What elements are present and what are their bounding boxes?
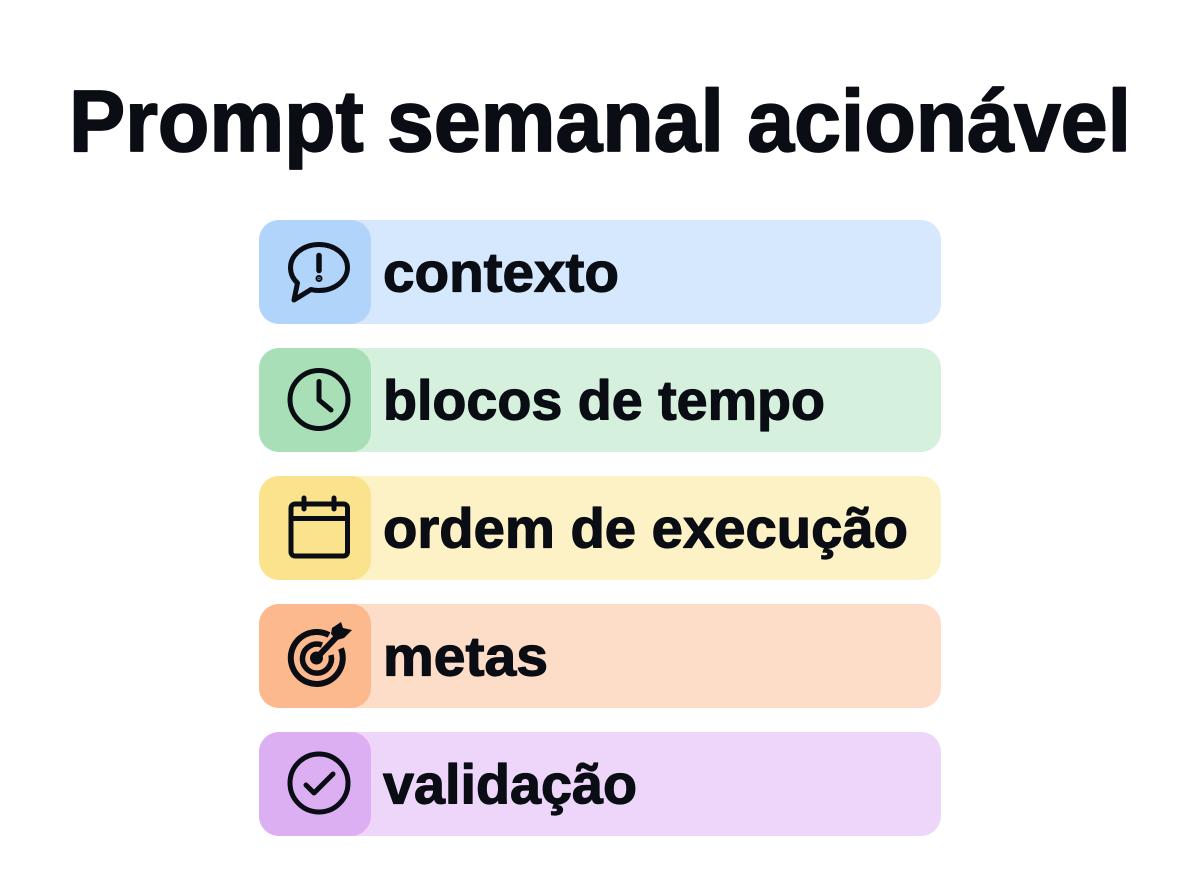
icon tile: ordem de execução [259, 476, 371, 580]
icon tile: contexto [259, 220, 371, 324]
panel: metas [259, 604, 941, 708]
label: validação: validação [383, 754, 637, 816]
panel: validação [259, 732, 941, 836]
icon tile: metas [259, 604, 371, 708]
icon: speech bubble with exclamation [290, 244, 348, 300]
icon: target with arrow [291, 622, 352, 684]
panel: contexto [259, 220, 941, 324]
icon: clock [290, 370, 348, 428]
title: Prompt semanal acionável [69, 73, 1131, 170]
icon tile: validação [259, 732, 371, 836]
label: contexto: contexto [383, 242, 619, 304]
panel: ordem de execução [259, 476, 941, 580]
label: metas: metas [383, 626, 548, 688]
label: ordem de execução: ordem de execução [383, 498, 908, 560]
icon tile: blocos de tempo [259, 348, 371, 452]
label: blocos de tempo: blocos de tempo [383, 370, 825, 432]
icon: check circle [290, 754, 348, 812]
panel: blocos de tempo [259, 348, 941, 452]
icon: calendar [291, 498, 348, 556]
